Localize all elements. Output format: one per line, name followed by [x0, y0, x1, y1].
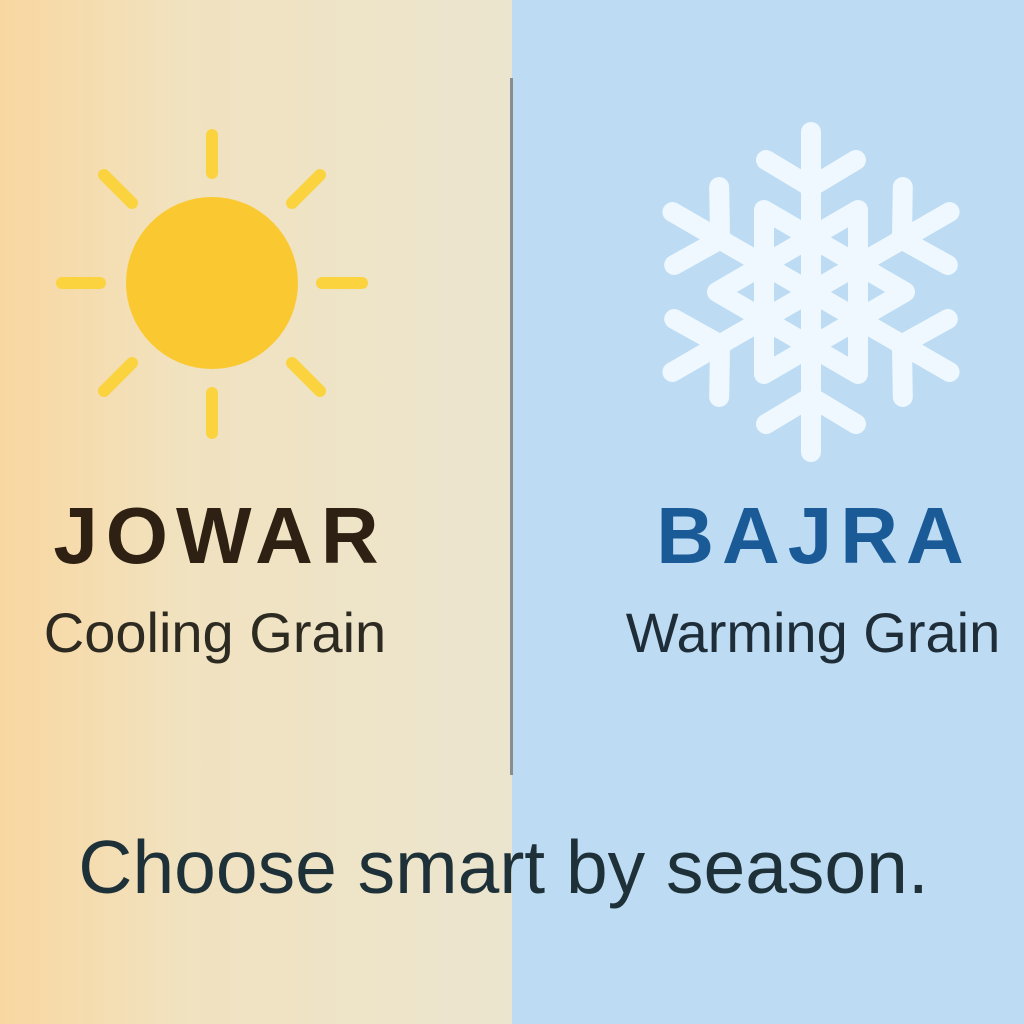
panel: bajra	[512, 0, 1024, 1024]
heading: jowar: JOWAR	[53, 491, 387, 580]
subtitle: warming grain: Warming Grain	[626, 601, 1000, 664]
panel: jowar	[0, 0, 512, 1024]
icon: sun	[56, 129, 368, 439]
heading: bajra: BAJRA	[656, 491, 972, 580]
icon: snowflake	[662, 122, 960, 462]
subtitle: cooling grain: Cooling Grain	[44, 601, 386, 664]
tagline: Choose smart by season.	[78, 825, 929, 909]
divider	[510, 78, 513, 775]
